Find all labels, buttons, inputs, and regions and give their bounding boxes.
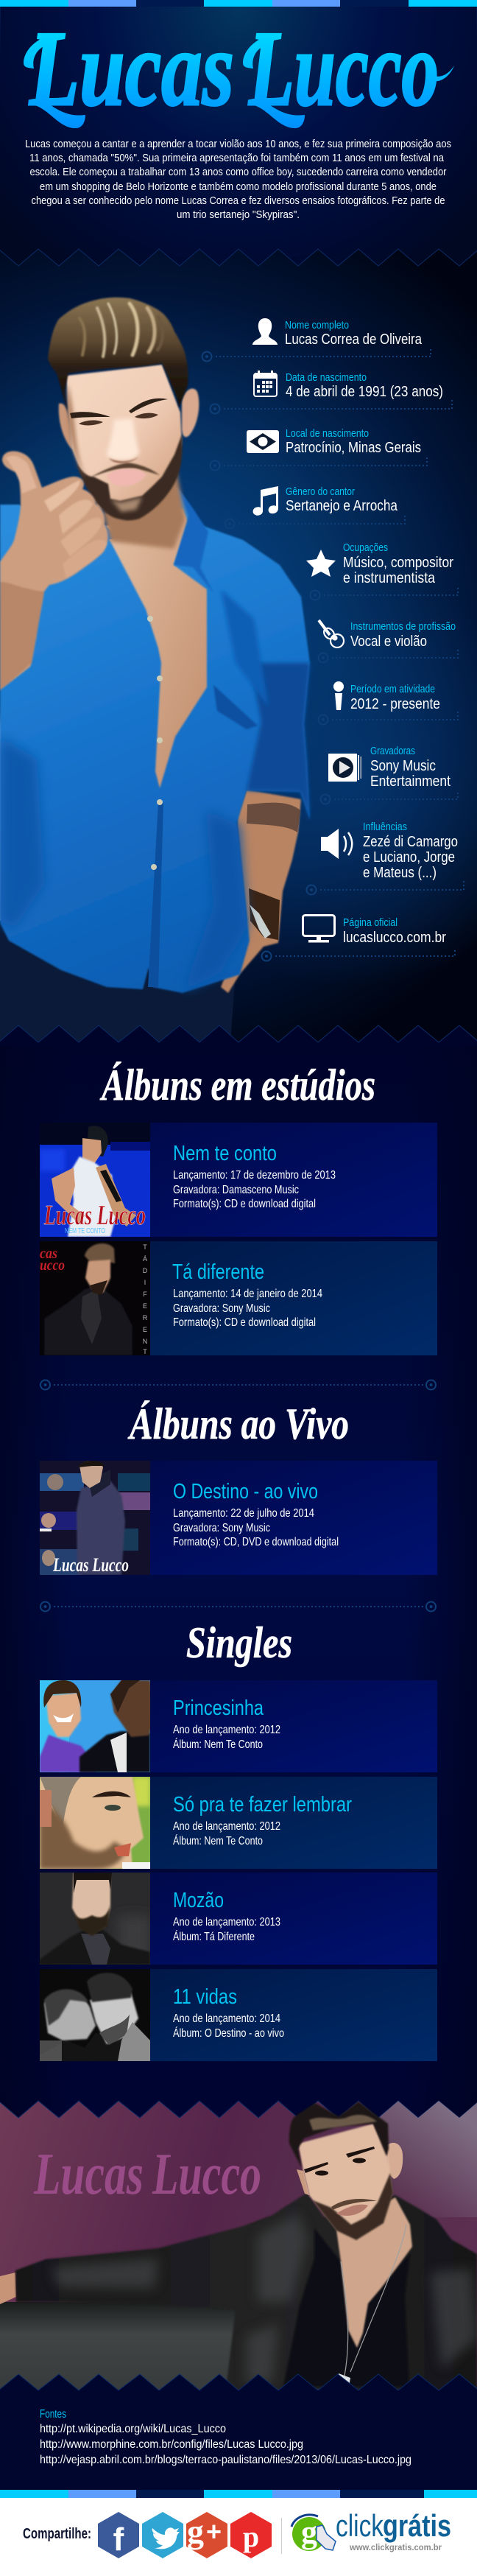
watermark name: Lucco xyxy=(152,2142,261,2207)
fact divider 6 xyxy=(318,648,458,663)
fact: gravadoras xyxy=(328,745,451,790)
single cover: Princesinha xyxy=(40,1680,150,1772)
ears xyxy=(59,389,199,449)
face xyxy=(66,365,182,519)
icon: google plus: + xyxy=(206,2516,222,2547)
sources list: http://vejasp.abril.com.br/blogs/terraco-paulistano/files/2013/06/Lucas-Lucco.jpg xyxy=(40,2454,411,2466)
fact: genero do cantor: Gênero do cantor xyxy=(286,485,355,498)
fact divider 3 xyxy=(211,457,427,470)
album card: Nem te conto: Lançamento: 17 de dezembro de 2013 xyxy=(173,1169,336,1182)
album cover: Ta diferente: E xyxy=(143,1326,147,1333)
fact divider 2 xyxy=(211,400,452,414)
fact: periodo em atividade: Período em atividade xyxy=(350,683,435,695)
fact: nome completo: Lucas Correa de Oliveira xyxy=(285,331,422,348)
fact: pagina oficial: lucaslucco.com.br xyxy=(343,929,446,946)
logo: click gratis: www.clickgratis.com.br xyxy=(349,2542,442,2552)
hand on sofa xyxy=(0,2273,16,2304)
shirt shading xyxy=(0,589,310,991)
hair xyxy=(289,2102,389,2168)
fact: pagina oficial xyxy=(303,915,446,946)
fact: local de nascimento xyxy=(247,427,421,456)
jacket highlights xyxy=(52,2214,477,2383)
eyes and brows xyxy=(70,399,168,425)
heading: singles: Singles xyxy=(186,1618,292,1667)
album card: Ta diferente xyxy=(40,1241,437,1355)
album cover: Ta diferente: Á xyxy=(143,1255,147,1263)
hero section: portrait and facts xyxy=(0,243,477,1053)
album card: O Destino: Lançamento: 22 de julho de 2014 xyxy=(173,1507,314,1520)
logo: click gratis: click xyxy=(336,2508,384,2543)
single card: Mozao: Álbum: Tá Diferente xyxy=(173,1929,255,1943)
icon: pinterest xyxy=(230,2512,272,2558)
single card: So pra te fazer lembrar xyxy=(40,1777,437,1869)
icon: twitter xyxy=(142,2512,183,2558)
sources list xyxy=(40,2423,411,2466)
intro paragraph: um trio sertanejo "Skypiras". xyxy=(177,208,300,221)
heading: albuns em estudios: Álbuns em estúdios xyxy=(99,1061,375,1109)
fact divider 4 xyxy=(225,516,405,529)
fact: gravadoras: Entertainment xyxy=(370,773,451,790)
icon: facebook xyxy=(98,2512,139,2558)
single cover: 11 vidas xyxy=(40,1969,150,2061)
title: Lucas xyxy=(28,9,234,128)
album card: O Destino: Formato(s): CD, DVD e download digital xyxy=(173,1536,339,1548)
album cover: Nem te conto xyxy=(40,1123,150,1237)
fact: local de nascimento: Patrocínio, Minas Gerais xyxy=(286,439,421,456)
single card: Mozao: Ano de lançamento: 2013 xyxy=(173,1916,280,1929)
icon: google plus xyxy=(186,2512,227,2558)
album card: Ta diferente: Tá diferente xyxy=(172,1260,264,1284)
fact: pagina oficial: Página oficial xyxy=(343,916,398,929)
logo: click gratis xyxy=(292,2508,451,2552)
album card: Ta diferente: Formato(s): CD e download digital xyxy=(173,1316,316,1329)
album cover: Ta diferente: T xyxy=(143,1243,147,1251)
album card: O Destino xyxy=(40,1461,437,1576)
collar left xyxy=(88,516,118,541)
portrait of Lucas Lucco in blue shirt xyxy=(0,298,310,1053)
head xyxy=(298,2124,392,2239)
footer panel xyxy=(0,2498,477,2576)
moustache and lips xyxy=(91,463,160,486)
single card: So pra te fazer lembrar: Ano de lançamento: 2012 xyxy=(173,1820,280,1833)
cheek shadow xyxy=(68,383,87,479)
album card: Nem te conto: Formato(s): CD e download digital xyxy=(173,1198,316,1210)
fact: instrumentos: Vocal e violão xyxy=(350,633,427,650)
sources list: http://pt.wikipedia.org/wiki/Lucas_Lucco xyxy=(40,2423,226,2435)
black shirt xyxy=(283,2228,410,2387)
hair highlights xyxy=(309,2115,377,2130)
nose underside xyxy=(109,457,138,463)
single card: So pra te fazer lembrar: Só pra te fazer lembrar xyxy=(173,1793,352,1817)
single cover: So pra te fazer lembrar xyxy=(40,1777,150,1869)
eyes and brows xyxy=(304,2147,375,2176)
icon: monitor xyxy=(303,915,334,943)
watermark name: Lucas xyxy=(33,2142,144,2207)
album cover: Ta diferente: cas xyxy=(40,1246,57,1262)
open collar and chest xyxy=(103,508,207,788)
fact: gravadoras: Sony Music xyxy=(370,757,436,774)
fact: periodo em atividade xyxy=(333,681,440,712)
pointing hand and forearm xyxy=(0,451,108,690)
icon: music note xyxy=(253,486,278,516)
single card: 11 vidas: Álbum: O Destino - ao vivo xyxy=(173,2026,284,2040)
single card: Princesinha: Álbum: Nem Te Conto xyxy=(173,1737,263,1751)
header background with zigzag edge xyxy=(0,0,477,266)
collar right xyxy=(174,486,213,593)
leather jacket and arm xyxy=(15,2193,477,2401)
fact: nome completo: Nome completo xyxy=(285,319,349,331)
chain and tag xyxy=(339,2225,406,2387)
fact: periodo em atividade: 2012 - presente xyxy=(350,695,440,712)
icon: calendar xyxy=(254,371,277,396)
photo background wall xyxy=(0,2101,477,2401)
logo mark: g xyxy=(301,2514,317,2550)
album cover: Ta diferente: F xyxy=(143,1291,147,1298)
album cover: Ta diferente: D xyxy=(143,1267,148,1274)
fact: ocupacoes xyxy=(306,541,453,586)
single card: Mozao xyxy=(40,1873,437,1965)
fact divider 10 xyxy=(262,948,455,961)
album cover: Nem te conto: NEM TE CONTO xyxy=(65,1227,105,1235)
ears xyxy=(297,2143,403,2195)
fact: genero do cantor xyxy=(253,485,398,516)
icon: speaker xyxy=(321,829,352,859)
sources panel xyxy=(0,2374,477,2491)
icon: facebook: f xyxy=(113,2521,124,2558)
album card: Nem te conto: Gravadora: Damasceno Music xyxy=(173,1184,299,1196)
album card: Ta diferente: Lançamento: 14 de janeiro de 2014 xyxy=(173,1288,322,1300)
fact: genero do cantor: Sertanejo e Arrocha xyxy=(286,497,398,514)
header panel xyxy=(0,0,477,266)
album cover: O Destino xyxy=(40,1461,150,1576)
fact: instrumentos: Instrumentos de profissão xyxy=(350,620,456,633)
single card: 11 vidas: Ano de lançamento: 2014 xyxy=(173,2012,280,2025)
fact: influencias: e Luciano, Jorge xyxy=(363,849,455,866)
album card: O Destino: O Destino - ao vivo xyxy=(173,1480,318,1503)
beard xyxy=(313,2173,393,2240)
fact: influencias: Influências xyxy=(363,821,407,833)
chin patch xyxy=(110,497,142,512)
neck and chest xyxy=(336,2197,412,2348)
fact divider 5 xyxy=(311,586,458,600)
album cover: Ta diferente: ucco xyxy=(40,1257,65,1274)
single cover: Mozao xyxy=(40,1873,150,1965)
fact: data de nascimento: Data de nascimento xyxy=(286,371,367,384)
single card: Princesinha: Ano de lançamento: 2012 xyxy=(173,1724,280,1736)
icon: play album xyxy=(328,754,361,782)
single card: Princesinha xyxy=(40,1680,437,1772)
single card: Mozao: Mozão xyxy=(173,1889,224,1912)
fact divider 9 xyxy=(306,881,464,894)
album card: O Destino: Gravadora: Sony Music xyxy=(173,1522,270,1534)
fact: influencias: e Mateus (...) xyxy=(363,864,437,881)
sofa xyxy=(0,2302,243,2401)
album cover: Ta diferente xyxy=(40,1241,150,1355)
fact divider 7 xyxy=(318,709,458,725)
closing photo panel xyxy=(0,2101,477,2401)
watermark name xyxy=(33,2142,261,2207)
fact: instrumentos xyxy=(319,620,456,650)
icon: pinterest: p xyxy=(243,2520,259,2553)
icon: google plus: g xyxy=(187,2513,204,2550)
hair highlights xyxy=(80,303,163,357)
beard xyxy=(76,435,183,520)
title xyxy=(24,9,454,128)
rear forearm with tattoo and bracelets xyxy=(221,790,301,993)
single card: 11 vidas: 11 vidas xyxy=(173,1985,237,2009)
fact: data de nascimento: 4 de abril de 1991 (23 anos) xyxy=(286,383,443,400)
fact divider 8 xyxy=(321,790,458,804)
hero background glow xyxy=(0,243,477,1053)
bottom colour bar xyxy=(0,2490,477,2498)
fact: gravadoras: Gravadoras xyxy=(370,745,415,757)
album cover: Ta diferente: N xyxy=(143,1338,147,1345)
sources heading: Fontes xyxy=(40,2408,66,2421)
footer divider xyxy=(281,2518,282,2554)
icon: guitar xyxy=(319,620,344,647)
single card: 11 vidas xyxy=(40,1969,437,2061)
album cover: Ta diferente: R xyxy=(143,1314,148,1322)
album card: Nem te conto: Nem te conto xyxy=(173,1142,277,1165)
fact: nome completo xyxy=(252,318,422,348)
sources background with zigzag edge xyxy=(0,2374,477,2491)
fact: influencias xyxy=(321,821,458,881)
moustache and lips xyxy=(331,2199,377,2216)
fact: ocupacoes: Músico, compositor xyxy=(343,554,453,571)
fact: data de nascimento xyxy=(254,371,443,400)
logo: click gratis: grátis xyxy=(383,2508,451,2543)
album card: Nem te conto xyxy=(40,1123,437,1237)
intro paragraph xyxy=(25,138,451,221)
fact: ocupacoes: e instrumentista xyxy=(343,569,436,586)
section divider xyxy=(40,1601,436,1612)
logo mark xyxy=(292,2514,336,2551)
shirt body xyxy=(0,486,310,993)
album card: Ta diferente: Gravadora: Sony Music xyxy=(173,1302,270,1315)
fact: ocupacoes: Ocupações xyxy=(343,541,388,554)
fact: influencias: Zezé di Camargo xyxy=(363,833,458,850)
nose xyxy=(107,418,139,460)
trousers xyxy=(0,921,236,1053)
discography section background xyxy=(0,1025,477,2121)
album cover: Ta diferente: I xyxy=(144,1279,146,1286)
fact divider 1 xyxy=(202,348,431,361)
sources list: http://www.morphine.com.br/config/files/Lucas Lucco.jpg xyxy=(40,2438,303,2451)
hair xyxy=(48,298,188,410)
top colour bar xyxy=(0,0,477,7)
section divider xyxy=(40,1380,436,1389)
single card: Princesinha: Princesinha xyxy=(173,1696,264,1720)
shirt buttons xyxy=(147,616,163,870)
fact: local de nascimento: Local de nascimento xyxy=(286,427,369,440)
icon: microphone xyxy=(333,681,344,710)
heading: albuns ao vivo: Álbuns ao Vivo xyxy=(127,1400,349,1448)
icon: star xyxy=(306,550,336,577)
album cover: Ta diferente: T xyxy=(143,1348,147,1355)
neck xyxy=(103,471,186,549)
icon: Brazil flag xyxy=(247,430,279,453)
icon: person xyxy=(252,318,278,345)
share label: Compartilhe: xyxy=(23,2526,91,2542)
single card: So pra te fazer lembrar: Álbum: Nem Te Conto xyxy=(173,1833,263,1847)
album cover: Ta diferente: E xyxy=(143,1302,147,1310)
